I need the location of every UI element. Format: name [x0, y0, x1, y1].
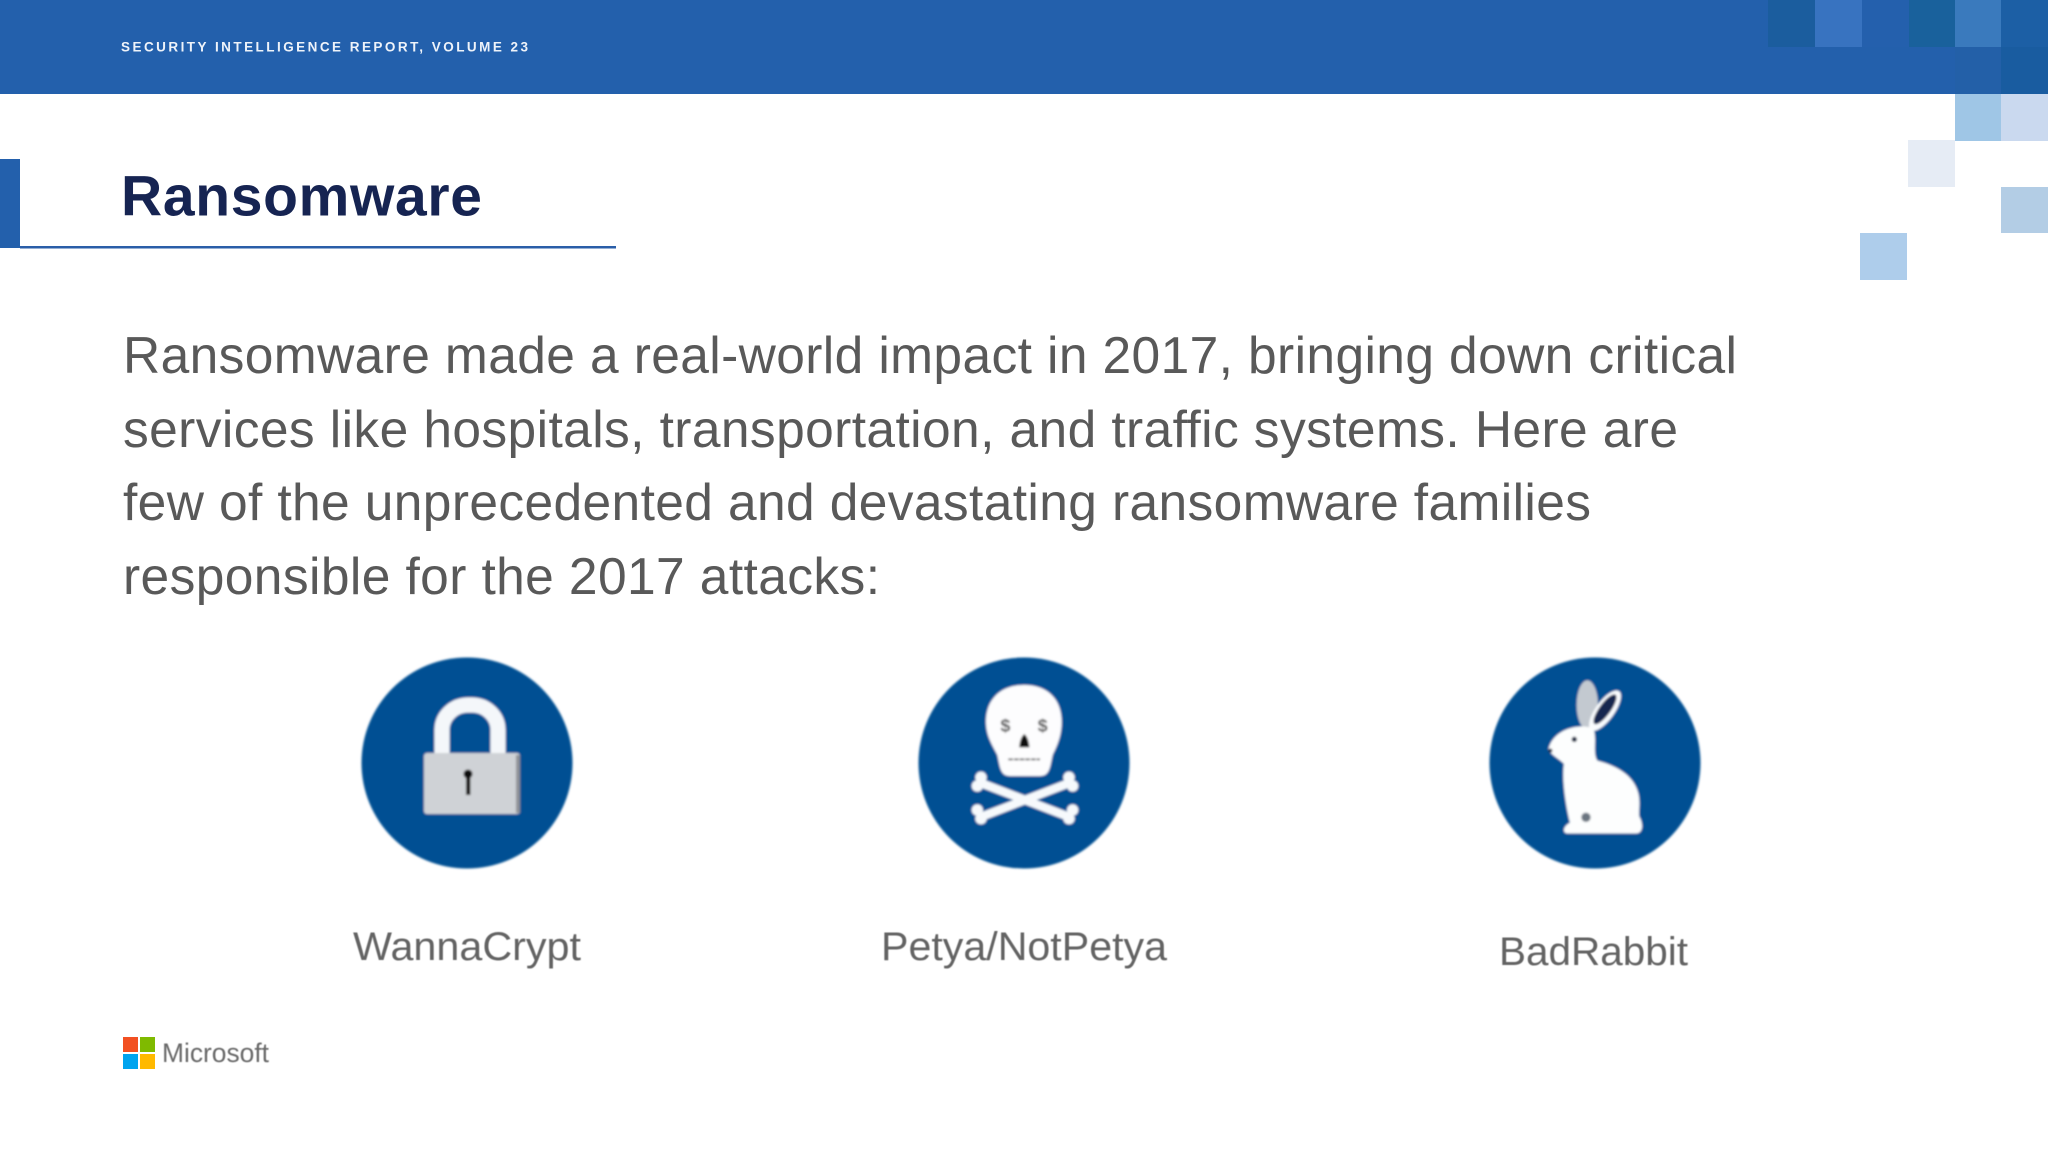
- decorative squares: [1860, 94, 2048, 280]
- header band: [0, 0, 2048, 94]
- card: BadRabbit: [1490, 658, 1700, 974]
- title accent bar and rule: [0, 159, 616, 248]
- icon: rabbit: [1490, 658, 1700, 868]
- wordmark: Microsoft: [162, 1038, 269, 1068]
- card: WannaCrypt: [353, 658, 581, 969]
- title: Ransomware: [121, 164, 482, 228]
- icon: four-colour squares: [123, 1037, 155, 1069]
- intro paragraph: [123, 326, 1737, 605]
- label: Petya/NotPetya: [881, 925, 1168, 969]
- card: Petya/NotPetya: [881, 658, 1168, 969]
- header text: SECURITY INTELLIGENCE REPORT, VOLUME 23: [121, 40, 528, 54]
- label: WannaCrypt: [353, 925, 581, 969]
- icon: skull and crossbones: [918, 658, 1130, 868]
- icon: padlock: [362, 658, 572, 868]
- intro paragraph: responsible for the 2017 attacks:: [123, 547, 880, 605]
- intro paragraph: Ransomware made a real-world impact in 2017, bringing down critical: [123, 326, 1737, 384]
- intro paragraph: few of the unprecedented and devastating ransomware families: [123, 473, 1591, 531]
- logo: Microsoft: [123, 1037, 269, 1069]
- intro paragraph: services like hospitals, transportation, and traffic systems. Here are: [123, 400, 1678, 458]
- icon: skull and crossbones: $: [1000, 715, 1010, 735]
- label: BadRabbit: [1499, 930, 1688, 974]
- icon: skull and crossbones: $: [1038, 715, 1048, 735]
